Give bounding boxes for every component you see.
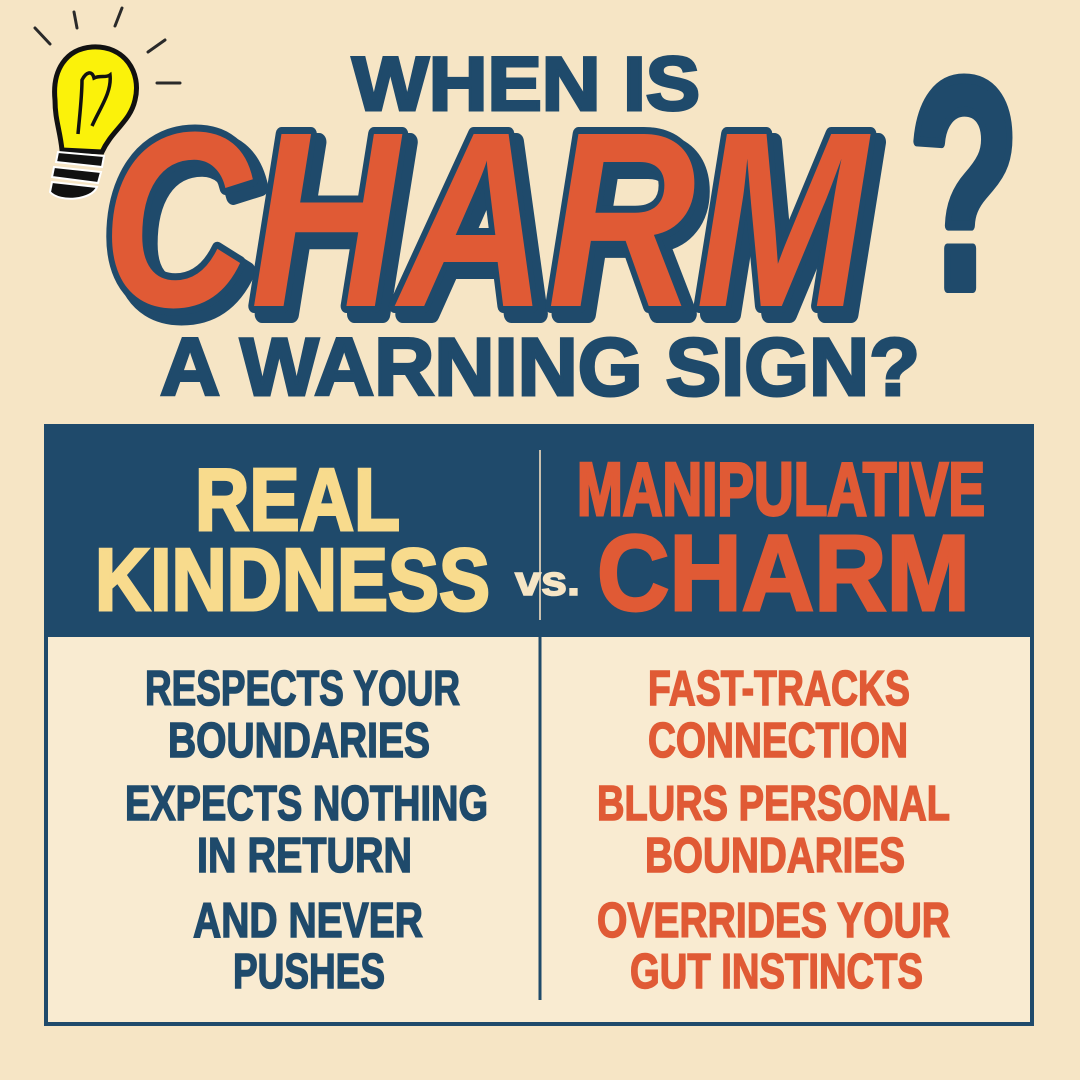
list: real kindness traits: PUSHES xyxy=(233,945,385,999)
heading: manipulative charm: CHARM xyxy=(597,512,970,633)
list: real kindness traits: EXPECTS NOTHING xyxy=(125,777,488,831)
title: WHEN IS: WHEN IS xyxy=(352,42,700,127)
list: manipulative charm traits: BOUNDARIES xyxy=(645,829,905,883)
title: A WARNING SIGN?: A WARNING SIGN? xyxy=(160,322,920,413)
list: real kindness traits: AND NEVER xyxy=(193,894,423,948)
list: real kindness traits xyxy=(125,662,488,999)
list: manipulative charm traits: BLURS PERSONAL xyxy=(597,777,950,831)
panel: comparison table xyxy=(46,426,1032,1024)
heading: manipulative charm xyxy=(577,447,985,633)
title: CHARM: CHARM xyxy=(110,88,879,367)
heading: real kindness: REAL xyxy=(195,450,400,549)
list: real kindness traits: IN RETURN xyxy=(197,829,412,883)
list: manipulative charm traits xyxy=(597,662,950,999)
heading: real kindness xyxy=(95,450,490,629)
heading: real kindness: KINDNESS xyxy=(95,530,490,629)
header band xyxy=(46,426,1032,637)
list: real kindness traits: BOUNDARIES xyxy=(168,714,430,768)
list: manipulative charm traits: GUT INSTINCTS xyxy=(630,945,923,999)
list: manipulative charm traits: FAST-TRACKS xyxy=(648,662,910,716)
list: manipulative charm traits: OVERRIDES YOUR xyxy=(597,894,950,948)
list: real kindness traits: RESPECTS YOUR xyxy=(145,662,460,716)
icon: lightbulb xyxy=(35,8,180,199)
list: manipulative charm traits: CONNECTION xyxy=(648,714,908,768)
vs label: vs. xyxy=(515,557,580,604)
title: CHARM: CHARM xyxy=(102,80,871,359)
